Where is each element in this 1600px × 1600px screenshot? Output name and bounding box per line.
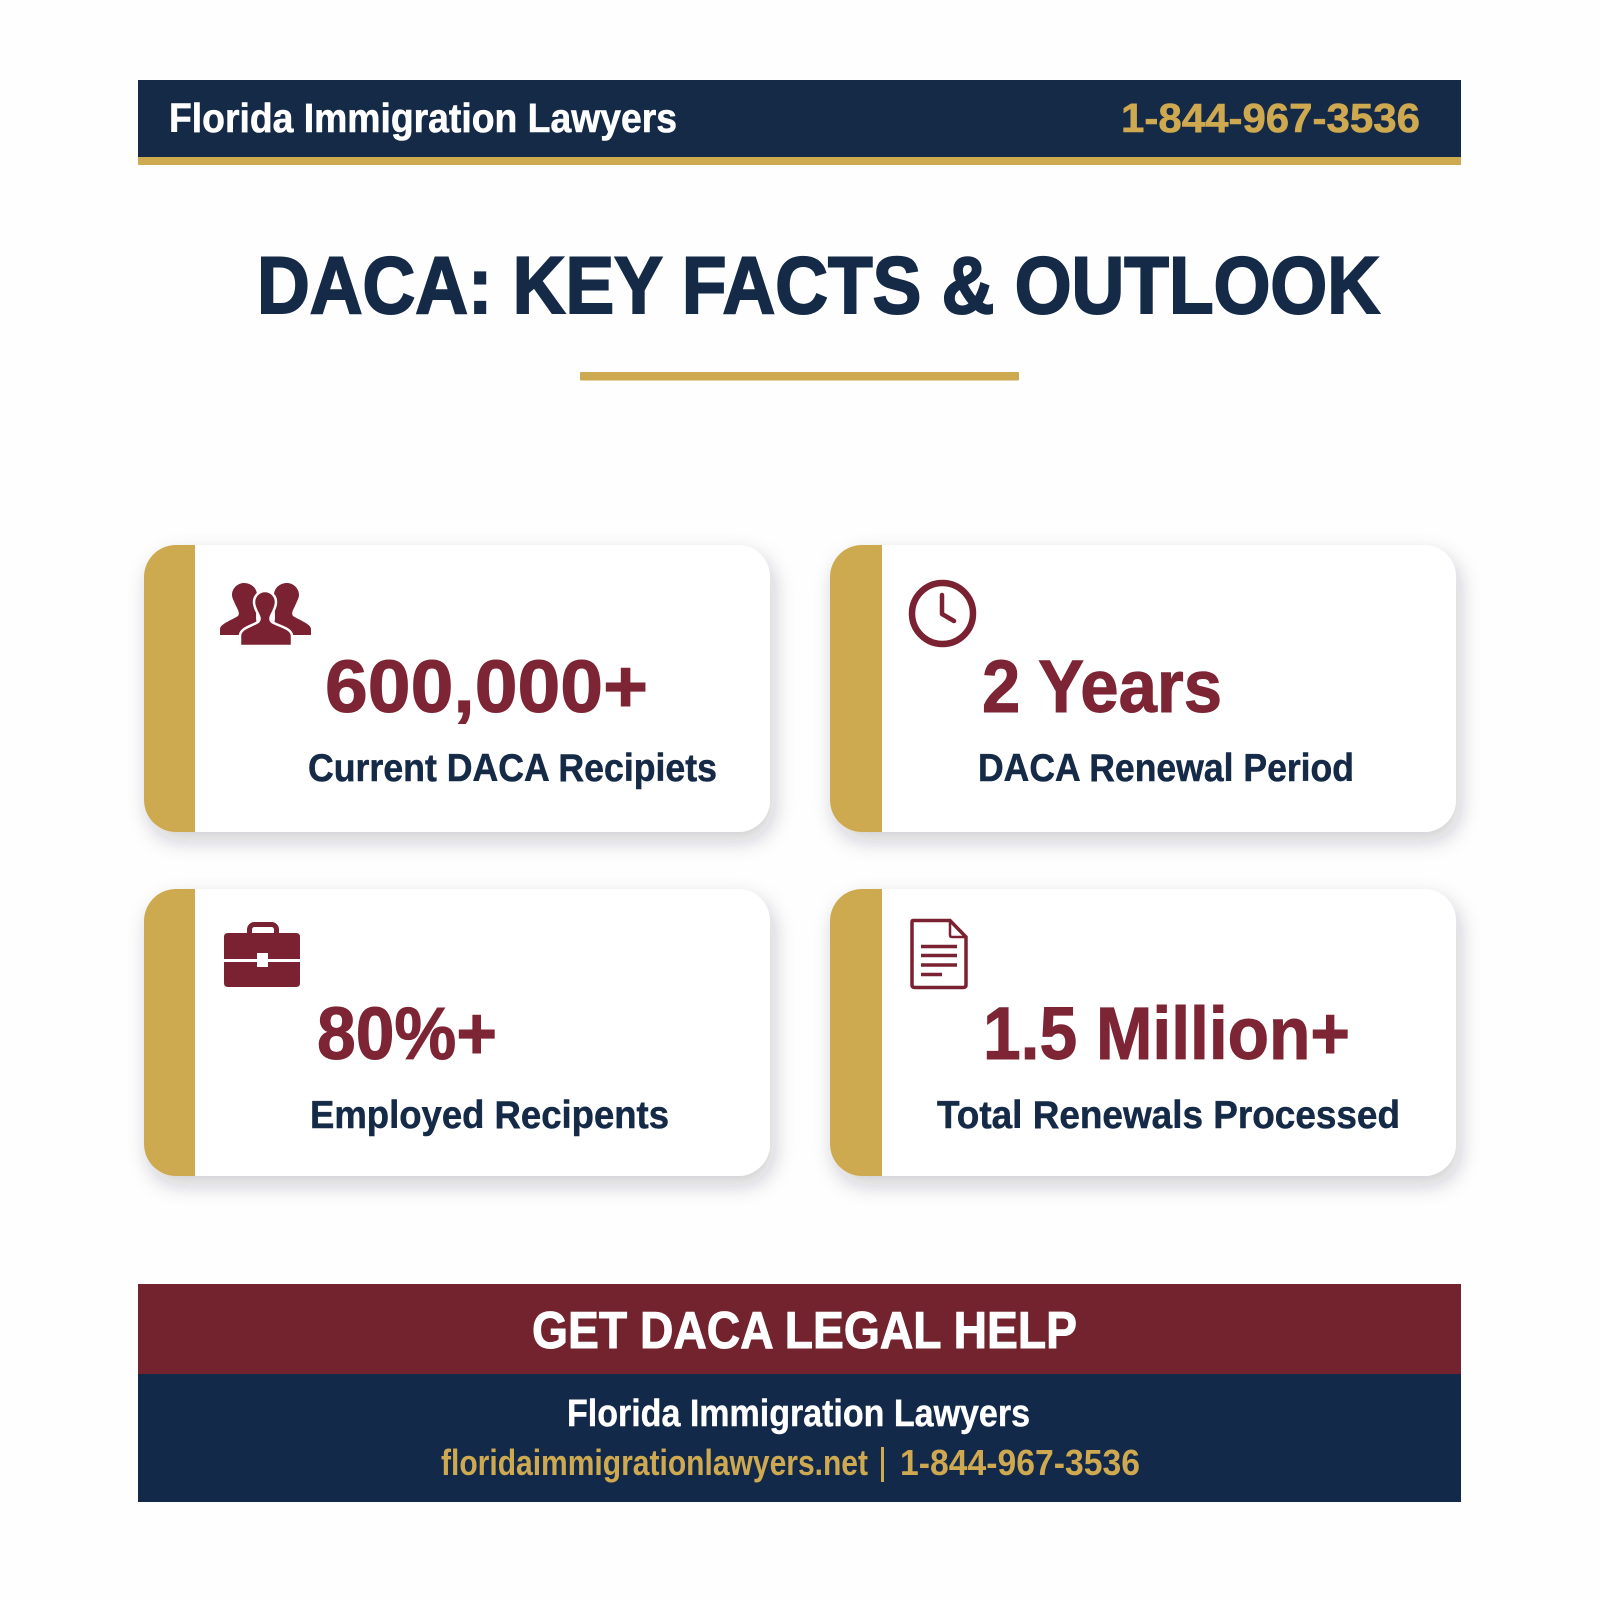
title underline — [580, 372, 1019, 380]
icon: briefcase — [224, 924, 300, 987]
header bar — [138, 80, 1461, 165]
icon: document — [912, 920, 966, 988]
label: total renewals processed: Total Renewals Processed — [937, 1094, 1400, 1137]
footer contact band — [138, 1374, 1461, 1502]
icon: people — [220, 583, 311, 646]
header firm name: Florida Immigration Lawyers — [169, 95, 677, 141]
icon: clock — [912, 583, 973, 644]
stat: 80%+: 80%+ — [317, 992, 497, 1075]
call to action heading: GET DACA LEGAL HELP — [532, 1302, 1077, 1360]
footer call to action band — [138, 1284, 1461, 1374]
panel: current recipients — [144, 545, 770, 832]
panel: employed recipients — [144, 889, 770, 1176]
label: DACA renewal period: DACA Renewal Period — [978, 747, 1354, 790]
footer website and phone: 1-844-967-3536 — [900, 1442, 1140, 1483]
stat: 600,000+: 600,000+ — [325, 645, 648, 728]
panel: total renewals — [830, 889, 1456, 1176]
footer website and phone: floridaimmigrationlawyers.net — [441, 1442, 868, 1483]
panel: renewal period — [830, 545, 1456, 832]
title: DACA: KEY FACTS & OUTLOOK — [257, 241, 1380, 331]
footer firm name: Florida Immigration Lawyers — [567, 1393, 1030, 1435]
stat: 2 years: 2 Years — [982, 645, 1222, 728]
header phone number: 1-844-967-3536 — [1121, 95, 1420, 141]
stat: 1.5 million+: 1.5 Million+ — [983, 992, 1350, 1075]
label: current DACA recipiets: Current DACA Recipiets — [308, 747, 717, 790]
label: employed recipents: Employed Recipents — [310, 1094, 669, 1137]
